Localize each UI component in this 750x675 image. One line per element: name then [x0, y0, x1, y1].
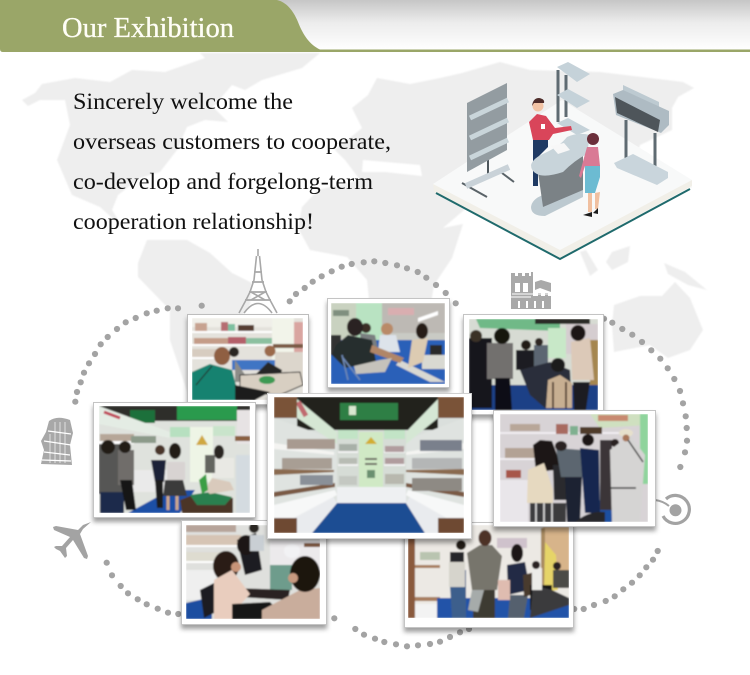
photo: standing visitors bottom right — [404, 522, 574, 628]
platform — [433, 100, 692, 260]
photo: seated women bottom left — [182, 520, 326, 624]
intro text block: Sincerely welcome the — [73, 89, 293, 114]
photo: booth meeting top left — [188, 314, 308, 404]
sign stand — [613, 85, 669, 185]
display board — [462, 83, 514, 197]
photo: crowded booth top right — [464, 314, 604, 414]
photo: robed visitor right — [494, 410, 656, 526]
icon: airplane — [53, 522, 91, 559]
dotted route — [72, 258, 690, 649]
world map background — [22, 53, 707, 400]
customer figure — [579, 133, 600, 217]
photo: central exhibition booth — [268, 394, 472, 538]
icon: Eiffel tower — [239, 249, 277, 313]
header gradient strip — [270, 0, 750, 50]
isometric exhibition booth illustration — [433, 62, 692, 260]
salesman figure — [529, 98, 572, 186]
intro text block: co-develop and forgelong-term — [73, 169, 373, 194]
icon: castle — [511, 272, 551, 309]
tall shelves — [557, 62, 590, 135]
counter — [531, 134, 590, 216]
intro text block: overseas customers to cooperate, — [73, 129, 391, 154]
green header tab — [0, 0, 750, 52]
icon: target — [655, 495, 689, 523]
intro text block: cooperation relationship! — [73, 209, 314, 234]
icon: leaning tower of Pisa — [41, 418, 73, 465]
photo: seated discussion top centre — [328, 298, 450, 388]
photo: booth visitors left — [94, 402, 256, 518]
title: Our Exhibition — [62, 13, 234, 44]
header band — [0, 0, 750, 52]
intro text block — [73, 89, 391, 234]
